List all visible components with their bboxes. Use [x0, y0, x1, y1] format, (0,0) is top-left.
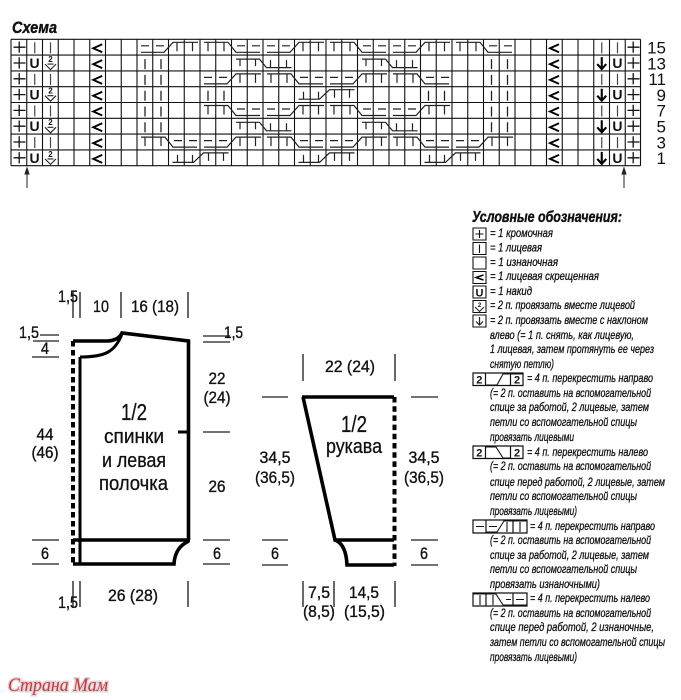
chart symbols: right edge columns: U: [612, 118, 622, 134]
back label: и левая: [102, 450, 166, 472]
back dimensions: 4: [41, 340, 49, 358]
back dimension lines: [32, 292, 230, 607]
row numbers: 11: [648, 70, 666, 89]
legend icon: left cable with knit stitches: [473, 446, 523, 460]
chart symbols: left edge columns: 2: [48, 150, 53, 159]
row numbers: 7: [657, 102, 666, 121]
legend icon: right cable with knit stitches: 2: [514, 374, 520, 386]
legend text: провязать лицевыми): [490, 650, 577, 664]
sleeve dimensions: 6: [420, 545, 428, 563]
arrow: repeat start left: [25, 168, 29, 188]
back dimensions: (46): [32, 444, 58, 462]
legend text: = 1 лицевая: [490, 241, 542, 255]
chart symbols: right edge columns: U: [612, 55, 622, 71]
row numbers: 3: [657, 133, 666, 152]
back dimensions: (24): [204, 389, 230, 407]
back dimensions: 16 (18): [131, 298, 179, 316]
sleeve outline: [302, 397, 394, 566]
chart symbols: left edge columns: 2: [48, 118, 53, 127]
row numbers: 9: [657, 86, 666, 105]
legend icon: left cable with knit stitches: 2: [514, 448, 520, 460]
panel: schematic of back and left front: [19, 288, 243, 612]
legend text: = 2 п. провязать вместе лицевой: [490, 298, 635, 312]
legend text: = 1 кромочная: [490, 226, 553, 240]
legend icon: right cable with purl stitches: [473, 520, 527, 533]
row numbers: 5: [657, 118, 666, 136]
legend icon: left cable with purl stitches: [473, 593, 527, 606]
back dimensions: 1,5: [19, 324, 39, 342]
chart symbols: left edge columns: 2: [48, 55, 53, 64]
watermark: Страна Мам: [8, 675, 108, 696]
legend text: петли со вспомогательной спицы: [490, 489, 637, 503]
legend text: провязать изнаночными): [490, 577, 600, 591]
back dimensions: 6: [213, 545, 221, 563]
back label: 1/2: [121, 399, 147, 425]
sleeve label: рукава: [326, 436, 383, 458]
chart symbols: right edge columns: [550, 42, 640, 166]
row numbers: 15: [647, 38, 666, 58]
legend text: = 1 лицевая скрещенная: [490, 269, 599, 283]
arrow: repeat start right: [622, 168, 626, 188]
title: Схема: Схема: [12, 18, 57, 37]
row numbers: [647, 38, 666, 168]
legend text: петли со вспомогательной спицы: [490, 562, 637, 576]
legend icon: right cable with knit stitches: [473, 373, 523, 386]
sleeve dimensions: 34,5: [260, 449, 290, 467]
legend icon: left cable with knit stitches: 2: [476, 448, 482, 460]
legend text: = 1 накид: [490, 284, 532, 298]
sleeve dimensions: (15,5): [344, 603, 385, 621]
chart symbols: left edge columns: U: [30, 150, 40, 166]
sleeve dimensions: 14,5: [349, 584, 379, 602]
legend text: провязать лицевыми: [490, 430, 574, 444]
legend text: = 1 изнаночная: [490, 255, 558, 269]
sleeve dimensions: [255, 358, 444, 621]
back label: [99, 399, 169, 495]
sleeve dimension lines: [262, 354, 438, 607]
chart symbols: left edge columns: U: [30, 118, 40, 134]
chart symbols: left edge columns: [14, 42, 102, 166]
sleeve dimensions: 34,5: [408, 449, 440, 467]
back dimensions: 1,5: [224, 324, 243, 342]
legend title: Условные обозначения:: [472, 209, 622, 226]
sleeve dimensions: (8,5): [303, 603, 335, 621]
sleeve label: [326, 411, 383, 458]
back dimensions: 44: [36, 426, 54, 444]
sleeve dimensions: 6: [271, 545, 279, 563]
back dimensions: 22: [208, 370, 226, 388]
chart grid: [11, 39, 640, 166]
legend text: провязать лицевыми): [490, 504, 577, 518]
row numbers: 13: [647, 54, 666, 73]
back label: спинки: [104, 426, 164, 448]
back label: полочка: [99, 473, 169, 495]
back dimensions: 26 (28): [108, 587, 158, 605]
back dimensions: 26: [208, 478, 226, 496]
back dimensions: 10: [93, 298, 109, 316]
back dimensions: 1,5: [58, 594, 78, 612]
sleeve dimensions: 7,5: [308, 584, 330, 602]
legend icons: single stitches: U: [476, 288, 484, 300]
back dimensions: 6: [41, 545, 49, 563]
legend text: влево (= 1 п. снять, как лицевую,: [490, 328, 634, 342]
back outline: [73, 333, 190, 566]
panel: legend: [472, 209, 665, 664]
panel: schematic of sleeve: [255, 354, 444, 621]
sleeve dimensions: (36,5): [255, 469, 295, 487]
legend icon: right cable with knit stitches: 2: [476, 374, 482, 386]
chart symbols: right edge columns: U: [612, 87, 622, 103]
back dimensions: [19, 288, 243, 612]
chart symbols: right edge columns: U: [612, 150, 622, 166]
row numbers: 1: [657, 149, 666, 168]
legend text: снятую петлю): [490, 357, 554, 371]
sleeve dimensions: 22 (24): [325, 358, 375, 376]
legend text: петли со вспомогательной спицы: [490, 415, 637, 429]
chart symbols: left edge columns: U: [30, 87, 40, 103]
legend icons: single stitches: [473, 228, 486, 327]
legend text: [489, 226, 665, 664]
chart symbols: left edge columns: 2: [48, 87, 53, 96]
sleeve dimensions: (36,5): [404, 469, 444, 487]
chart symbols: left edge columns: U: [30, 55, 40, 71]
sleeve label: 1/2: [341, 411, 367, 437]
chart symbols: cables: [141, 42, 513, 162]
back dimensions: 1,5: [58, 288, 78, 306]
knitting chart: [11, 38, 666, 188]
legend icons: single stitches: 2: [478, 303, 482, 309]
